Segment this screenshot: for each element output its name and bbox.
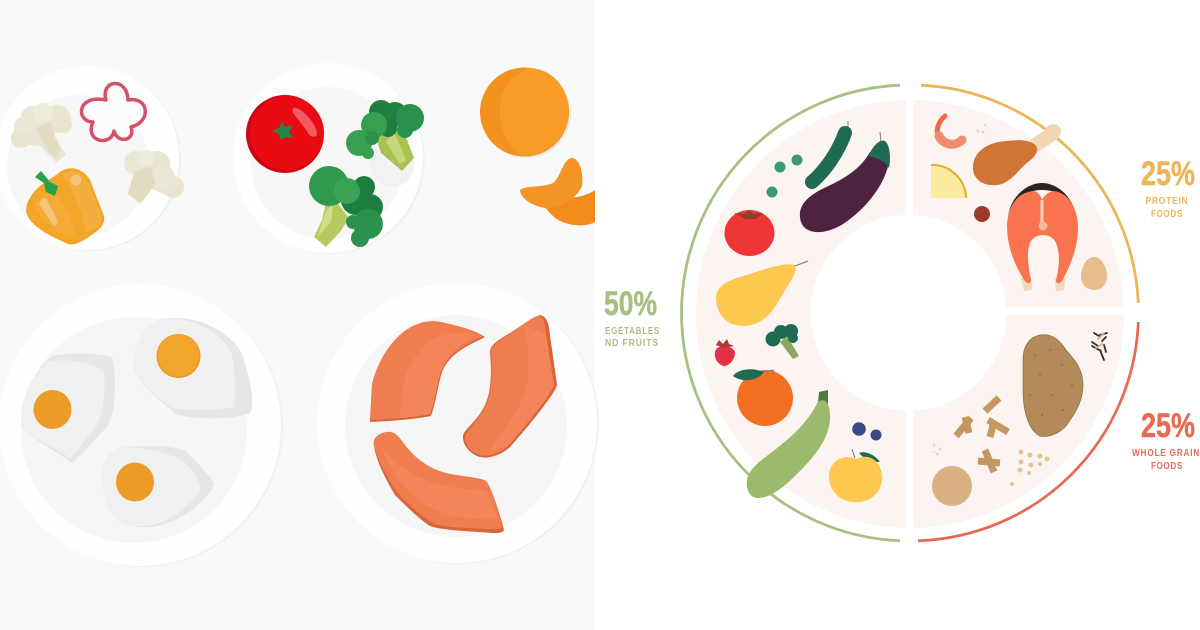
icon: pasta — [956, 398, 1008, 472]
icon: cauliflower right — [124, 150, 184, 204]
label: 25 percent whole grain foods: FOODS — [1151, 460, 1183, 472]
label: 50 percent vegetables and fruits: ND FRUITS — [605, 337, 659, 349]
label: 25 percent protein foods: FOODS — [1151, 208, 1183, 220]
plate background quadrants — [696, 90, 1135, 540]
label: 25 percent protein foods — [1141, 155, 1195, 220]
icon: fried egg left — [21, 353, 115, 463]
icon: salmon slice right — [463, 315, 557, 458]
icon: chicken leg — [973, 124, 1061, 185]
label: 50 percent vegetables and fruits: 50% — [604, 285, 657, 323]
icon: cucumber — [812, 121, 848, 182]
icon: wild rice — [1092, 333, 1107, 360]
icon: cheese — [931, 165, 966, 198]
icon: zucchini — [747, 390, 830, 498]
icon: tangerine — [733, 369, 793, 426]
icon: bean — [974, 206, 990, 222]
arc: protein foods — [921, 85, 1138, 303]
icon: yellow bell pepper — [26, 168, 104, 245]
plate: fried eggs — [0, 284, 283, 567]
icon: egg — [1081, 257, 1107, 290]
icon: strawberry — [715, 339, 735, 366]
plate: tomato and broccoli — [233, 63, 425, 254]
icon: whole orange — [480, 68, 571, 158]
icon: apple — [829, 449, 882, 502]
label: 25 percent protein foods: PROTEIN — [1146, 195, 1188, 207]
icon: cauliflower left — [11, 103, 72, 162]
icon: broccoli lower — [309, 166, 383, 247]
icon: blueberries — [852, 422, 882, 440]
icon: broccoli upper — [346, 100, 424, 171]
icon: tomato — [246, 95, 324, 173]
panel: plate diagram — [604, 85, 1200, 541]
icon: eggplant — [800, 132, 890, 232]
panel: food plates photo — [0, 0, 599, 630]
plate: peppers and cauliflower — [0, 66, 184, 251]
icon: shrimp — [937, 116, 962, 144]
icon: salmon steak — [1007, 183, 1078, 291]
icon: salmon slice bottom — [374, 432, 504, 533]
icon: fried egg top — [134, 318, 252, 418]
icon: tangerine segments — [520, 158, 595, 225]
icon: pear — [716, 261, 808, 326]
icon: red pepper ring — [82, 83, 145, 141]
icon: broccoli small — [766, 324, 799, 359]
plate: salmon slices — [317, 283, 599, 564]
decoration: seeds near cracker — [933, 444, 941, 455]
label: 25 percent whole grain foods — [1132, 407, 1200, 472]
icon: grains — [1010, 450, 1050, 486]
label: 50 percent vegetables and fruits: EGETABLES — [605, 325, 660, 337]
icon: fried egg bottom — [102, 446, 214, 527]
icon: peas — [766, 154, 802, 198]
icon: bread loaf — [1023, 335, 1083, 436]
label: 50 percent vegetables and fruits — [604, 285, 660, 349]
icon: salmon slice top left — [370, 321, 485, 422]
arc: whole grain foods — [918, 322, 1138, 541]
icon: round cracker — [932, 466, 972, 506]
decoration: seeds near shrimp — [976, 124, 986, 134]
icon: tomato — [724, 210, 774, 256]
arc: vegetables and fruits — [682, 85, 900, 541]
